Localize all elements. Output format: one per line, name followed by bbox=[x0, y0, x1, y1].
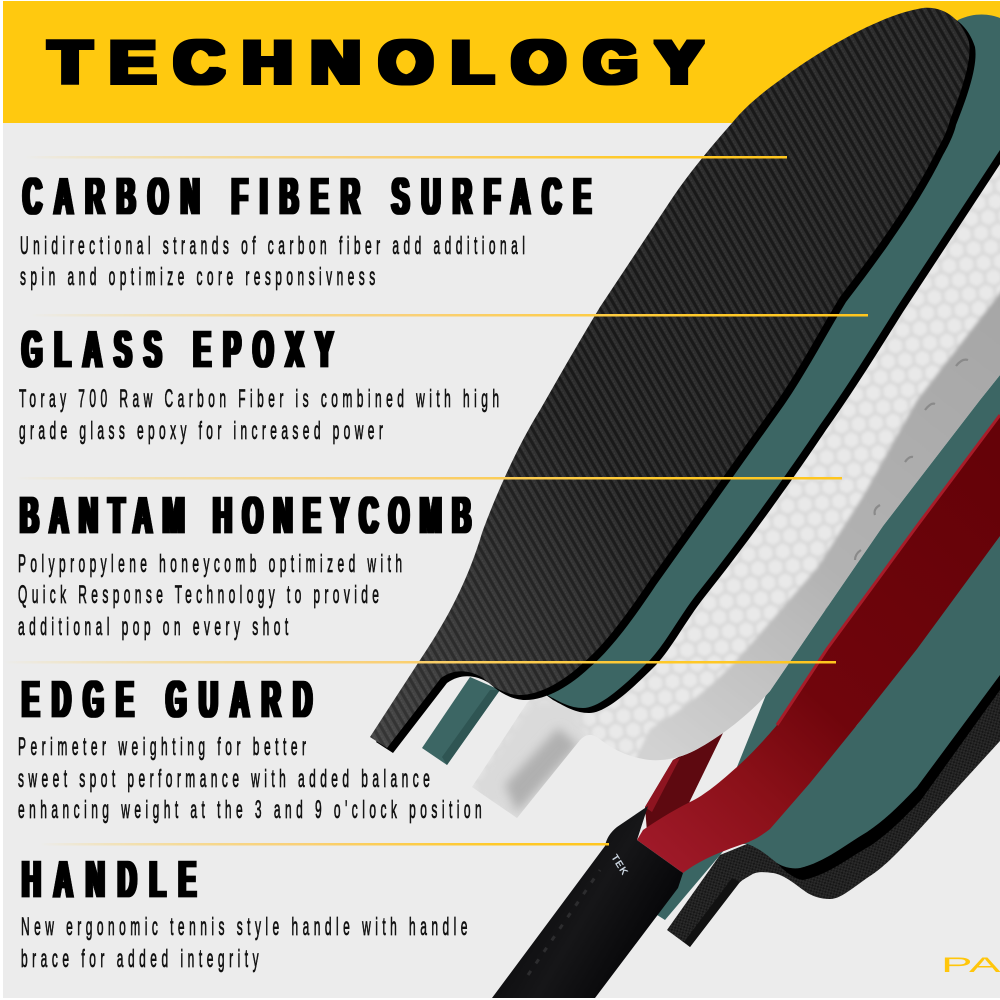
layer: handle bbox=[492, 806, 683, 998]
section: bantam honeycomb bbox=[18, 486, 471, 641]
text: carbon fiber description: spin and optimize core responsivness bbox=[20, 263, 375, 291]
text: handle description: brace for added integrity bbox=[21, 945, 259, 973]
yellow leader lines bbox=[3, 156, 868, 846]
title: TECHNOLOGY bbox=[49, 28, 702, 96]
text: glass epoxy description: Toray 700 Raw Carbon Fiber is combined with high bbox=[19, 385, 499, 413]
layer: top carbon fiber surface bbox=[370, 8, 976, 753]
heading: handle: HANDLE bbox=[22, 850, 196, 908]
heading: edge guard: EDGE GUARD bbox=[22, 670, 312, 728]
section: edge guard bbox=[18, 670, 482, 824]
text: glass epoxy description: grade glass epoxy for increased power bbox=[19, 417, 383, 445]
text: bantam honeycomb description: additional pop on every shot bbox=[18, 613, 289, 641]
text: handle description bbox=[21, 913, 467, 973]
text: handle description: New ergonomic tennis style handle with handle bbox=[21, 913, 467, 941]
section: carbon fiber surface bbox=[20, 167, 591, 291]
text: edge guard description bbox=[18, 733, 482, 824]
layer: back carbon face bbox=[667, 660, 1000, 947]
layer: back teal face bbox=[743, 530, 1000, 868]
layer: back teal strip bbox=[654, 848, 726, 920]
text: edge guard description: enhancing weight at the 3 and 9 o'clock position bbox=[18, 796, 482, 824]
text: glass epoxy description bbox=[19, 385, 499, 445]
logo fragment: PA bbox=[941, 953, 1000, 977]
heading: carbon fiber surface: CARBON FIBER SURFACE bbox=[23, 167, 591, 225]
text: carbon fiber description bbox=[20, 232, 525, 291]
layer: red stub back bbox=[645, 733, 723, 832]
text: carbon fiber description: Unidirectional strands of carbon fiber add additional bbox=[20, 232, 525, 260]
layer: red edge guard bbox=[637, 415, 1000, 873]
handle logo text: TEK bbox=[608, 853, 630, 878]
text: bantam honeycomb description bbox=[18, 550, 402, 641]
layer: teal glass epoxy bbox=[422, 14, 1000, 765]
heading: glass epoxy: GLASS EPOXY bbox=[22, 320, 333, 378]
text: edge guard description: sweet spot performance with added balance bbox=[18, 765, 430, 793]
exploded paddle illustration bbox=[370, 8, 1000, 998]
header band bbox=[3, 1, 1000, 123]
text: bantam honeycomb description: Quick Response Technology to provide bbox=[18, 581, 379, 609]
section: glass epoxy bbox=[19, 320, 499, 445]
section: handle bbox=[21, 850, 467, 973]
text: edge guard description: Perimeter weighting for better bbox=[18, 733, 306, 761]
heading: bantam honeycomb: BANTAM HONEYCOMB bbox=[20, 486, 471, 544]
layer: upper teal strip bbox=[737, 360, 1000, 780]
text: bantam honeycomb description: Polypropylene honeycomb optimized with bbox=[18, 550, 402, 578]
layer: honeycomb core bbox=[460, 150, 1000, 830]
